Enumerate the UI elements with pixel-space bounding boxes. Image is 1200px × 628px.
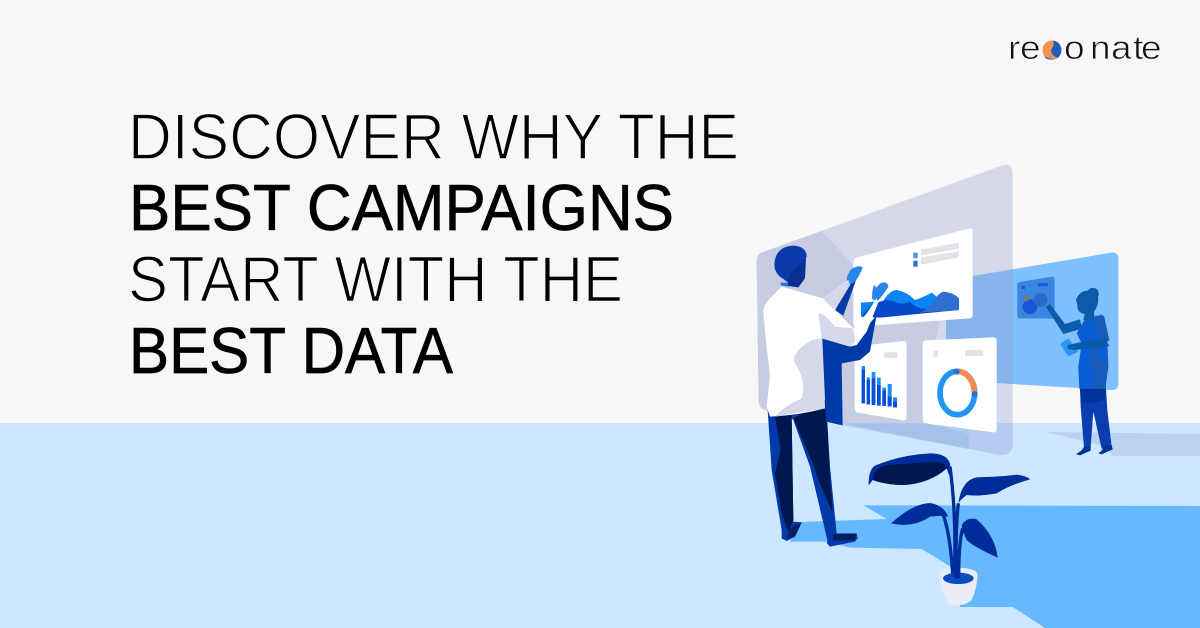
large translucent panel: [757, 165, 1013, 455]
illustration: scene in zoom coordinates: [757, 165, 1118, 547]
legend: [913, 253, 918, 258]
title: [128, 100, 739, 387]
panel darker section: [757, 231, 940, 423]
legs: [1080, 388, 1112, 449]
illustration: floor shadows: [790, 432, 1200, 628]
logo swirl: [1042, 40, 1062, 60]
bar chart card: [855, 341, 907, 420]
legs: [768, 400, 858, 547]
under coat body: [822, 315, 877, 425]
stems: [943, 467, 963, 578]
head: [1076, 288, 1099, 321]
panel floor shadow: [843, 423, 969, 449]
leaves: [869, 453, 953, 487]
lower arm: [1068, 339, 1109, 350]
small data card on blue panel: [1017, 277, 1055, 319]
tablet: [1060, 338, 1078, 357]
dress: [1077, 314, 1108, 389]
panel overlap with blue panel: [946, 269, 1013, 382]
bars: [862, 366, 897, 407]
title: BEST CAMPAIGNS: [129, 171, 674, 244]
donut: [940, 371, 975, 415]
feet: [1076, 445, 1113, 455]
logo: resonate: onate: [1064, 30, 1162, 67]
donut chart card: [923, 337, 997, 432]
far arm: [835, 278, 857, 316]
hands: [847, 266, 863, 283]
background wall: [0, 0, 1200, 424]
floor: [0, 423, 1200, 628]
title: DISCOVER WHY THE: [128, 100, 739, 173]
area chart: [861, 290, 959, 317]
logo: resonate: [1008, 30, 1162, 67]
line chart card: [853, 228, 973, 327]
woman figure: [1046, 288, 1113, 455]
logo: resonate: re: [1008, 30, 1041, 67]
coat shading: [775, 281, 855, 417]
arm: [1046, 304, 1082, 334]
coat: [763, 280, 878, 417]
collar: [781, 283, 789, 287]
blue back panel: [946, 253, 1118, 390]
title: BEST DATA: [129, 314, 454, 387]
head: [774, 246, 807, 283]
plant: [869, 453, 1030, 606]
man figure: [763, 246, 888, 547]
pot: [939, 568, 978, 606]
title: START WITH THE: [128, 242, 623, 316]
